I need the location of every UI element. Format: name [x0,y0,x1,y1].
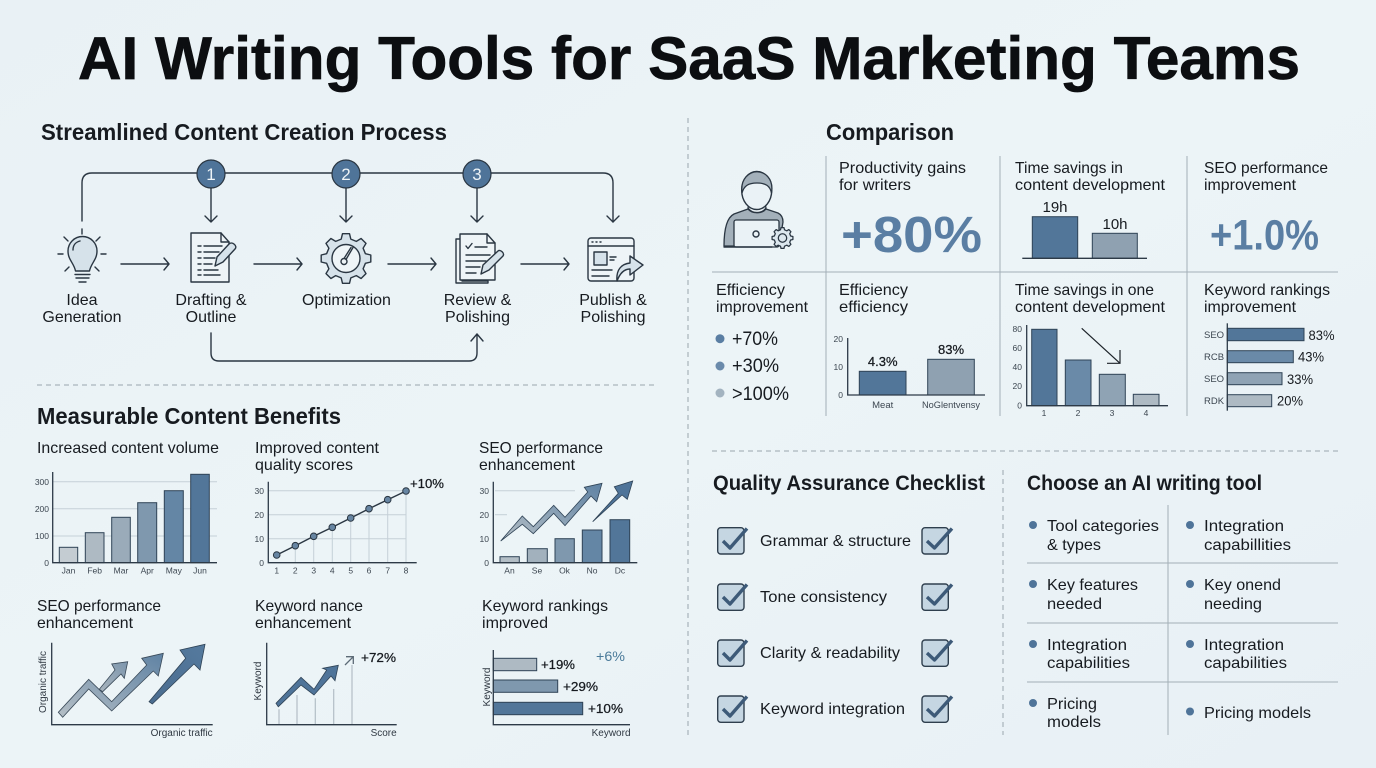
chart: keyword enhancement arrow [253,598,397,739]
chart: SEO performance bars with arrows: An [504,566,515,576]
chart: efficiency bars: 4.3% [868,354,898,369]
panel: comparison [712,119,1338,418]
chart: keyword enhancement arrow: Score [371,728,397,739]
chart: increased content volume: Jun [193,566,207,576]
title: AI Writing Tools for SaaS Marketing Teams [78,25,1300,92]
chart: SEO performance bars with arrows: 20 [480,510,489,520]
step labels: Polishing [581,309,645,326]
step labels: Optimization [302,292,391,309]
chart: efficiency bars: Efficiency [839,282,908,299]
icon: gear with gauge [321,234,371,283]
chart: SEO performance bars with arrows: 0 [484,558,489,568]
chart: SEO performance bars with arrows: enhancement [479,457,576,474]
chart: quality scores line: quality scores [255,457,353,474]
item: integration right [1186,637,1287,672]
step labels: Polishing [445,309,510,326]
chart: increased content volume: Jan [62,566,76,576]
chart: time savings descending bars: 60 [1013,343,1022,353]
checklist row: keyword [718,696,952,722]
chart: quality scores line: 6 [367,566,372,576]
chart: SEO organic traffic arrows: enhancement [37,615,134,632]
chart: SEO organic traffic arrows: Organic traffic [38,651,49,713]
stat: productivity gains: for writers [839,177,911,194]
stat: productivity gains: +80% [841,206,982,263]
panel: choose an AI writing tool [1027,471,1338,735]
item: tool categories: Tool categories [1047,518,1159,535]
item: tool categories [1029,518,1159,554]
stat list: efficiency improvement: >100% [732,384,789,405]
icon: publish browser window [588,238,643,281]
chart: efficiency bars: efficiency [839,299,908,316]
chart: keyword rankings horizontal bars: +29% [563,679,598,694]
chart: increased content volume: Apr [141,566,154,576]
stat: SEO performance improvement: +1.0% [1210,212,1319,260]
icon: review documents [456,234,503,283]
chart: time savings descending bars: 4 [1144,408,1149,418]
step number 2: 2 [341,165,351,184]
stat: SEO performance improvement: SEO performance [1204,160,1328,177]
step labels: Drafting & [175,292,247,309]
chart: SEO performance bars with arrows: 10 [480,534,489,544]
item: key features: needed [1047,596,1102,613]
chart: increased content volume: 200 [35,504,49,514]
chart: efficiency bars: Meat [872,400,894,411]
item: integration left: Integration [1047,637,1127,654]
checklist row: keyword: Keyword integration [760,701,905,718]
chart: quality scores line: 3 [311,566,316,576]
chart: keyword rankings improvement bars [1204,282,1334,411]
chart: keyword rankings improvement bars: RDK [1204,396,1225,407]
chart: quality scores line: 5 [348,566,353,576]
chart: keyword rankings horizontal bars: +6% [596,648,625,664]
stat list: efficiency improvement [716,282,809,405]
step number 1: 1 [206,165,216,184]
chart: increased content volume: May [166,566,183,576]
item: integration capabilities: capabillities [1204,537,1291,554]
step number 3: 3 [472,165,482,184]
stat: productivity gains [839,160,982,263]
checklist row: grammar [718,528,952,554]
chart: keyword rankings improvement bars: improvement [1204,299,1297,316]
stat: productivity gains: Productivity gains [839,160,966,177]
step number 1 [197,160,225,188]
step number 3 [463,160,491,188]
stat list: efficiency improvement: Efficiency [716,282,785,299]
checklist row: tone: Tone consistency [760,589,887,606]
item: integration capabilities: Integration [1204,518,1284,535]
chart: SEO organic traffic arrows: Organic traffic [151,728,213,739]
step number 2 [332,160,360,188]
item: key features [1029,577,1138,613]
chart: keyword rankings horizontal bars [482,598,630,739]
item: integration left: capabilities [1047,655,1130,672]
chart: time savings bars: Time savings in [1015,160,1123,177]
chart: quality scores line: 4 [330,566,335,576]
chart: SEO organic traffic arrows [37,598,213,739]
item: pricing models left [1029,696,1101,731]
chart: keyword rankings improvement bars: 33% [1287,371,1313,387]
chart: quality scores line: 30 [255,486,264,496]
chart: time savings descending bars: 2 [1076,408,1081,418]
chart: increased content volume [35,440,219,576]
chart: time savings bars: content development [1015,177,1166,194]
chart: efficiency bars [834,282,985,411]
heading: comparison: Comparison [826,119,954,145]
checklist row: grammar: Grammar & structure [760,533,911,550]
chart: keyword enhancement arrow: +72% [361,650,396,665]
stat list: efficiency improvement: improvement [716,299,809,316]
icon: document with pencil [191,233,236,282]
chart: SEO performance bars with arrows: No [587,566,598,576]
stat: SEO performance improvement: improvement [1204,177,1297,194]
chart: keyword rankings horizontal bars: +10% [588,701,623,716]
chart: keyword rankings improvement bars: SEO [1204,330,1224,341]
chart: SEO organic traffic arrows: SEO performance [37,598,161,615]
heading: choose a tool: Choose an AI writing tool [1027,471,1262,495]
chart: increased content volume: 0 [44,558,49,568]
chart: time savings descending bars: 3 [1110,408,1115,418]
chart: SEO performance bars with arrows: Dc [615,566,626,576]
step labels: Generation [42,309,122,326]
item: pricing models left: models [1047,714,1101,731]
chart: increased content volume: Feb [87,566,102,576]
item: integration capabilities [1186,518,1291,554]
stat list: efficiency improvement: +70% [732,329,778,350]
step labels: Idea [66,292,98,309]
chart: keyword rankings improvement bars: RCB [1204,352,1224,363]
chart: time savings bars [1015,160,1166,258]
chart: quality scores line: 0 [259,558,264,568]
chart: increased content volume: 100 [35,531,49,541]
chart: quality scores line: +10% [410,476,444,491]
chart: increased content volume: Increased content volume [37,440,219,457]
chart: SEO performance bars with arrows [479,440,637,576]
chart: time savings descending bars: content development [1015,299,1166,316]
chart: quality scores line: Improved content [255,440,380,457]
chart: efficiency bars: 10 [834,362,843,372]
chart: keyword rankings horizontal bars: +19% [541,657,575,672]
chart: efficiency bars: 0 [838,390,843,400]
chart: time savings bars: 10h [1102,216,1128,233]
chart: keyword rankings horizontal bars: Keyword rankings [482,598,608,615]
chart: increased content volume: Mar [114,566,128,576]
item: key onend: Key onend [1204,577,1281,594]
chart: quality scores line: 7 [385,566,390,576]
checklist row: tone [718,584,952,610]
heading: process: Streamlined Content Creation Process [41,119,447,145]
panel: quality assurance checklist [713,471,985,722]
chart: quality scores line: 2 [293,566,298,576]
item: pricing models left: Pricing [1047,696,1097,713]
step labels: Outline [186,309,236,326]
chart: time savings descending bars: 80 [1013,324,1022,334]
step labels [42,292,647,326]
chart: efficiency bars: 83% [938,342,964,357]
icon: light bulb [58,229,106,282]
chart: time savings bars: 19h [1042,199,1068,216]
chart: time savings descending bars [1013,282,1168,418]
panel: content creation process [41,119,647,361]
stat list: efficiency improvement: +30% [732,356,779,377]
checklist row: clarity: Clarity & readability [760,645,900,662]
item: pricing models right: Pricing models [1204,705,1311,722]
flow line: top connector with arrows [82,173,619,222]
chart: SEO performance bars with arrows: SEO performance [479,440,603,457]
checklist row: clarity [718,640,952,666]
arrows between steps [121,258,569,270]
item: key onend [1186,577,1281,613]
chart: keyword rankings improvement bars: 43% [1298,348,1324,364]
chart: keyword rankings improvement bars: SEO [1204,374,1224,385]
chart: time savings descending bars: 0 [1017,400,1022,410]
heading: checklist: Quality Assurance Checklist [713,471,985,495]
chart: keyword rankings improvement bars: 83% [1308,327,1334,343]
chart: keyword rankings horizontal bars: Keyword [592,728,630,739]
chart: quality scores line: 20 [255,510,264,520]
chart: keyword rankings horizontal bars: improved [482,615,548,632]
item: integration left [1029,637,1130,672]
item: key onend: needing [1204,596,1262,613]
chart: time savings descending bars: 40 [1013,362,1022,372]
item: key features: Key features [1047,577,1138,594]
chart: keyword rankings improvement bars: 20% [1277,392,1303,408]
chart: quality scores line: 10 [255,534,264,544]
chart: keyword enhancement arrow: enhancement [255,615,352,632]
chart: time savings descending bars: Time savings in one [1015,282,1154,299]
chart: keyword enhancement arrow: Keyword nance [255,598,363,615]
step labels: Publish & [579,292,647,309]
chart: time savings descending bars: 20 [1013,381,1022,391]
chart: efficiency bars: NoGlentvensy [922,400,980,411]
chart: quality scores line [255,440,444,576]
step labels: Review & [444,292,512,309]
chart: keyword rankings improvement bars: Keyword rankings [1204,282,1330,299]
chart: increased content volume: 300 [35,477,49,487]
chart: quality scores line: 8 [404,566,409,576]
flow line: bottom feedback loop [211,333,483,361]
chart: efficiency bars: 20 [834,334,843,344]
chart: keyword rankings horizontal bars: Keyword [482,668,493,706]
heading: benefits: Measurable Content Benefits [37,403,341,429]
item: integration right: Integration [1204,637,1284,654]
chart: keyword enhancement arrow: Keyword [253,662,264,700]
icon: person with laptop and gear [724,172,793,248]
chart: SEO performance bars with arrows: Ok [559,566,571,576]
chart: SEO performance bars with arrows: Se [532,566,542,576]
item: integration right: capabilities [1204,655,1287,672]
panel: measurable benefits [35,403,637,739]
chart: time savings descending bars: 1 [1042,408,1047,418]
chart: quality scores line: 1 [274,566,279,576]
stat: SEO performance improvement [1204,160,1328,260]
chart: SEO performance bars with arrows: 30 [480,486,489,496]
item: tool categories: & types [1047,537,1101,554]
